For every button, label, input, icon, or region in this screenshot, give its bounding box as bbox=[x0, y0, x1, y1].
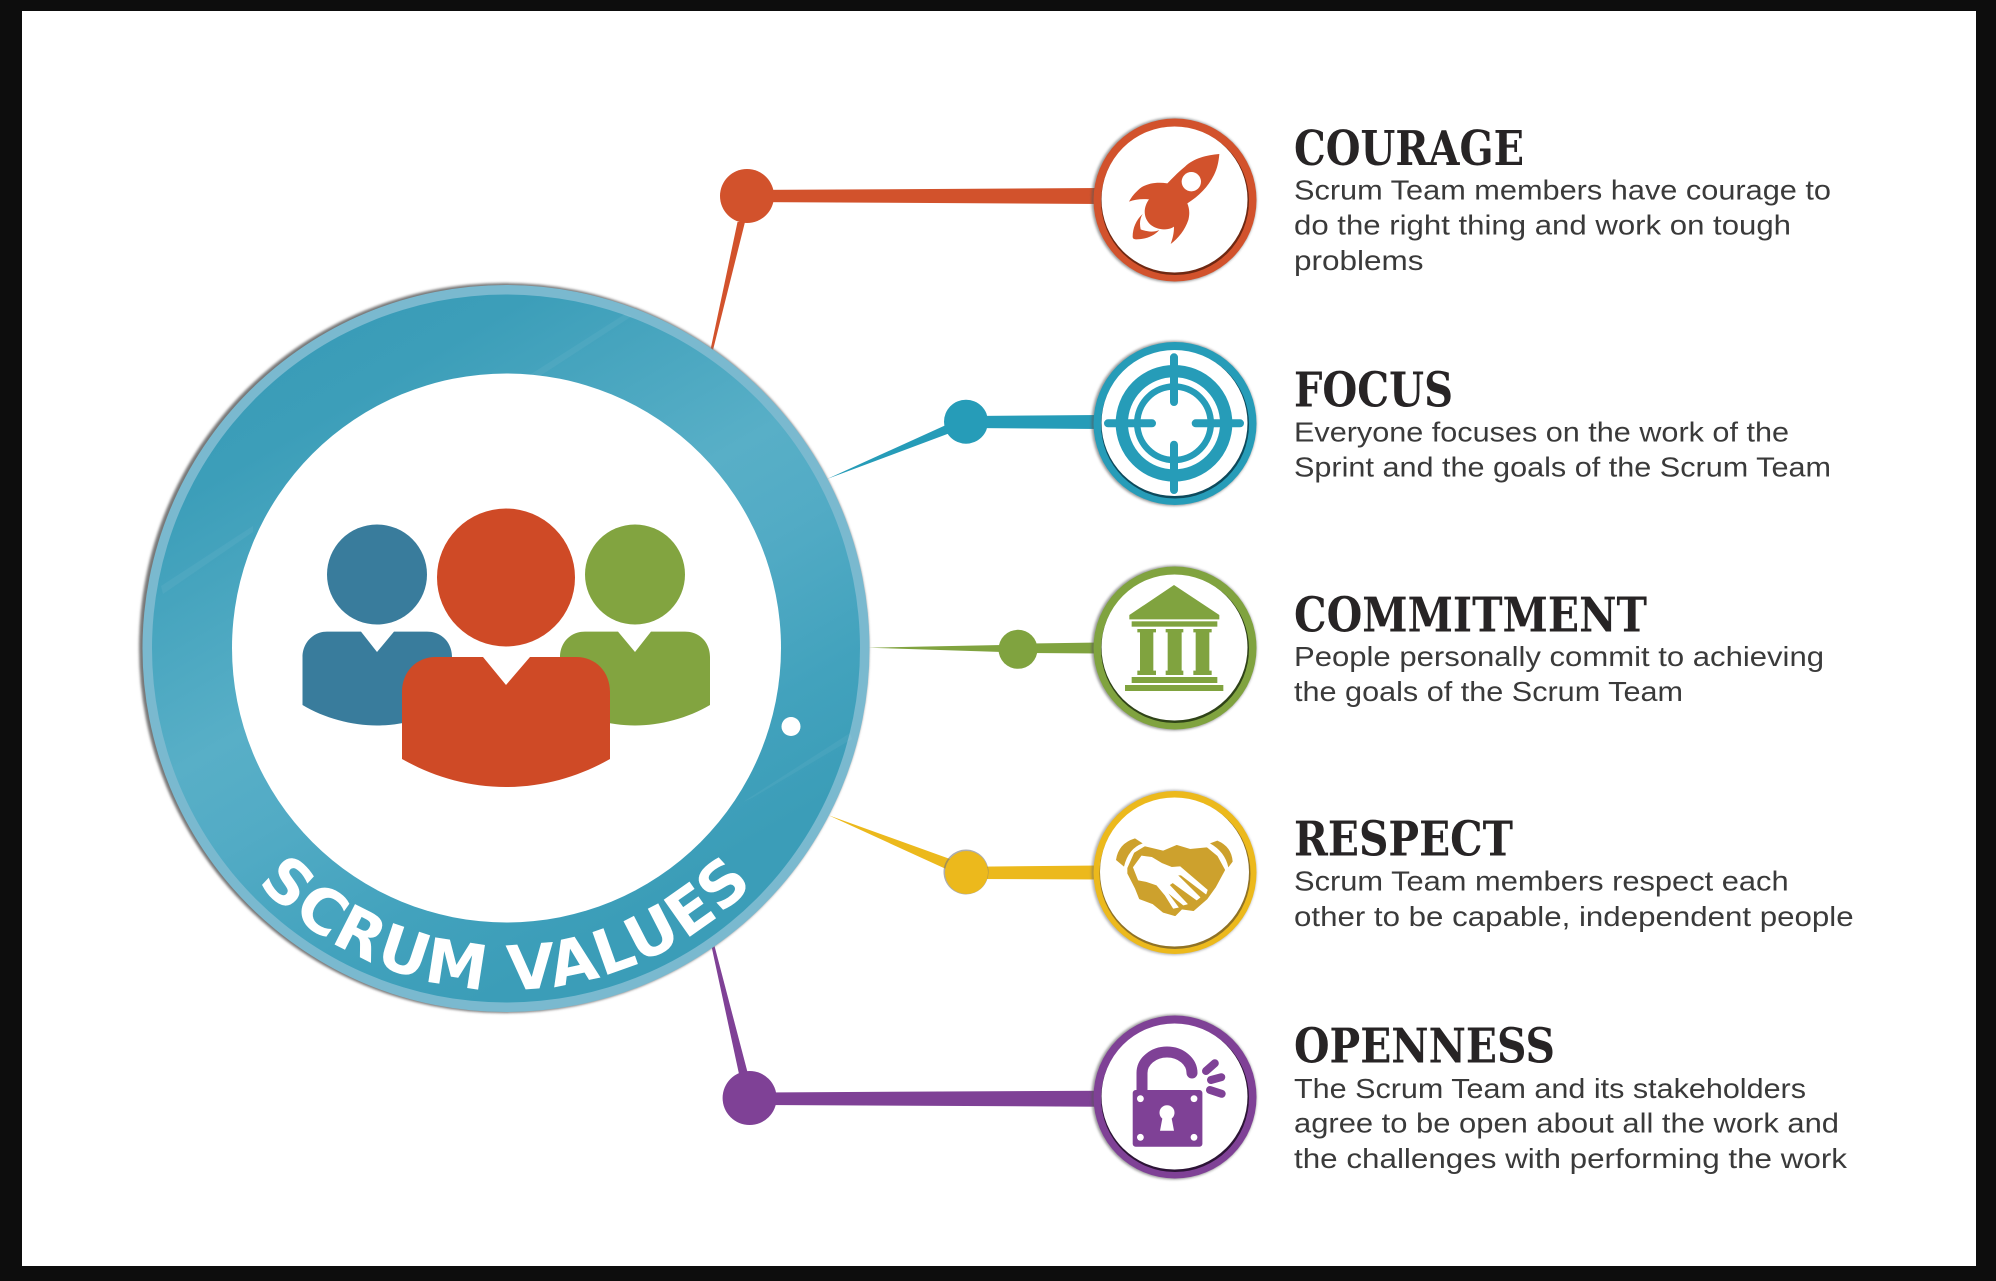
heading: focus: FOCUS bbox=[1294, 363, 1453, 419]
icon: team of three people bbox=[302, 508, 710, 787]
connector: openness bbox=[711, 944, 1100, 1125]
panel: focus bbox=[827, 341, 1831, 506]
text: courage description bbox=[1294, 174, 1831, 276]
text: courage description: do the right thing and work on tough bbox=[1294, 210, 1791, 241]
heading: commitment: COMMITMENT bbox=[1294, 587, 1647, 643]
text: focus description: Everyone focuses on the work of the bbox=[1294, 417, 1789, 448]
badge outer rim bbox=[142, 285, 870, 1012]
panel: openness bbox=[711, 944, 1848, 1180]
heading: courage: COURAGE bbox=[1294, 121, 1524, 177]
badge shadow bbox=[139, 283, 869, 1013]
text: respect description bbox=[1294, 865, 1854, 932]
text: openness description: the challenges with performing the work bbox=[1294, 1143, 1848, 1174]
person: green bbox=[560, 524, 710, 726]
text: focus description bbox=[1294, 417, 1831, 483]
connector: commitment bbox=[868, 630, 1100, 669]
badge ring bbox=[152, 294, 860, 1002]
icon: handshake bbox=[1092, 790, 1256, 955]
text: commitment description bbox=[1294, 641, 1824, 707]
panel: commitment bbox=[868, 566, 1824, 730]
badge inner disc bbox=[232, 374, 781, 922]
panel: respect bbox=[828, 790, 1854, 955]
heading: respect: RESPECT bbox=[1294, 812, 1513, 868]
icon: open lock bbox=[1092, 1014, 1256, 1180]
connector: respect bbox=[828, 815, 1100, 894]
text: commitment description: People personally commit to achieving bbox=[1294, 641, 1824, 672]
ring highlights bbox=[161, 314, 852, 802]
icon: building bbox=[1092, 566, 1256, 730]
person: blue bbox=[302, 524, 452, 726]
text: courage description: problems bbox=[1294, 245, 1424, 276]
panel: courage bbox=[710, 118, 1831, 352]
text: respect description: other to be capable, independent people bbox=[1294, 901, 1854, 932]
person: orange bbox=[402, 508, 610, 787]
text: commitment description: the goals of the Scrum Team bbox=[1294, 676, 1683, 707]
white marker dot bbox=[782, 717, 800, 736]
connector: courage bbox=[710, 169, 1100, 352]
connector: focus bbox=[827, 400, 1100, 479]
text: openness description: The Scrum Team and its stakeholders bbox=[1294, 1073, 1806, 1104]
curved title: scrum values: SCRUM VALUES bbox=[262, 857, 746, 990]
text: focus description: Sprint and the goals of the Scrum Team bbox=[1294, 452, 1831, 483]
icon: rocket bbox=[1092, 118, 1256, 282]
text: openness description: agree to be open about all the work and bbox=[1294, 1108, 1839, 1139]
text: openness description bbox=[1294, 1073, 1848, 1174]
icon: target bbox=[1092, 341, 1256, 506]
text: courage description: Scrum Team members have courage to bbox=[1294, 174, 1831, 206]
panel: scrum values badge bbox=[137, 281, 871, 1015]
heading: openness: OPENNESS bbox=[1294, 1018, 1555, 1074]
text: respect description: Scrum Team members respect each bbox=[1294, 865, 1789, 896]
